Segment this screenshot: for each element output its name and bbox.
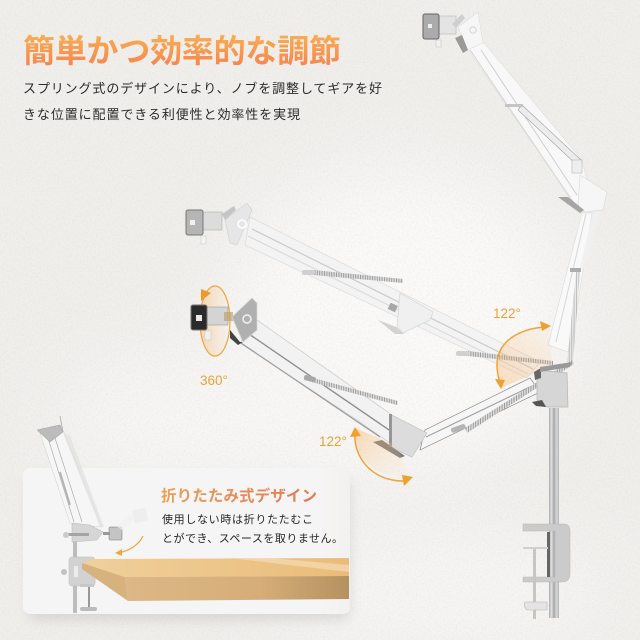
folded stand miniature bbox=[37, 416, 148, 613]
stand: lower arm bbox=[240, 320, 427, 458]
upper camera mount bbox=[423, 14, 465, 47]
middle plate bbox=[225, 203, 252, 245]
stand: pole and desk clamp bbox=[523, 408, 570, 619]
lower camera mount and plate bbox=[191, 298, 257, 345]
description text: スプリング式のデザインにより、ノブを調整してギアを好 bbox=[23, 81, 382, 96]
elbow block bbox=[578, 175, 607, 212]
fold direction arrow bbox=[115, 536, 143, 556]
upper plate bbox=[458, 12, 483, 50]
card shadow bbox=[28, 478, 350, 620]
head block bbox=[537, 370, 568, 407]
label: 122 degrees upper: 122° bbox=[493, 306, 521, 321]
panel: folding design card bbox=[23, 416, 350, 614]
stand: upright arm bbox=[548, 212, 600, 362]
middle arm spring bbox=[313, 270, 403, 283]
stand: middle arm bbox=[186, 203, 553, 378]
card body text bbox=[162, 512, 343, 545]
middle camera mount bbox=[186, 206, 236, 244]
description text bbox=[23, 81, 382, 122]
stand: upper raised arm bbox=[423, 12, 607, 213]
stand: lower right arm and base head bbox=[420, 360, 574, 450]
angle wedge: lower 122° bbox=[350, 427, 413, 486]
card heading: 折りたたみ式デザイン bbox=[161, 486, 317, 505]
label: 122 degrees lower: 122° bbox=[319, 434, 347, 449]
rotation ellipse 360° bbox=[200, 286, 230, 356]
lower arm spring bbox=[304, 376, 398, 405]
middle elbow block bbox=[397, 293, 433, 333]
angle wedge: upper 122° bbox=[495, 321, 552, 389]
description text: きな位置に配置できる利便性と効率性を実現 bbox=[23, 107, 300, 122]
wooden desk bbox=[82, 558, 349, 601]
card body text: とができ、スペースを取りません。 bbox=[162, 531, 343, 545]
card body text: 使用しない時は折りたたむこ bbox=[162, 512, 313, 526]
title: 簡単かつ効率的な調節 bbox=[23, 33, 341, 69]
label: 360 degrees: 360° bbox=[200, 373, 228, 388]
lower elbow block bbox=[390, 415, 427, 457]
